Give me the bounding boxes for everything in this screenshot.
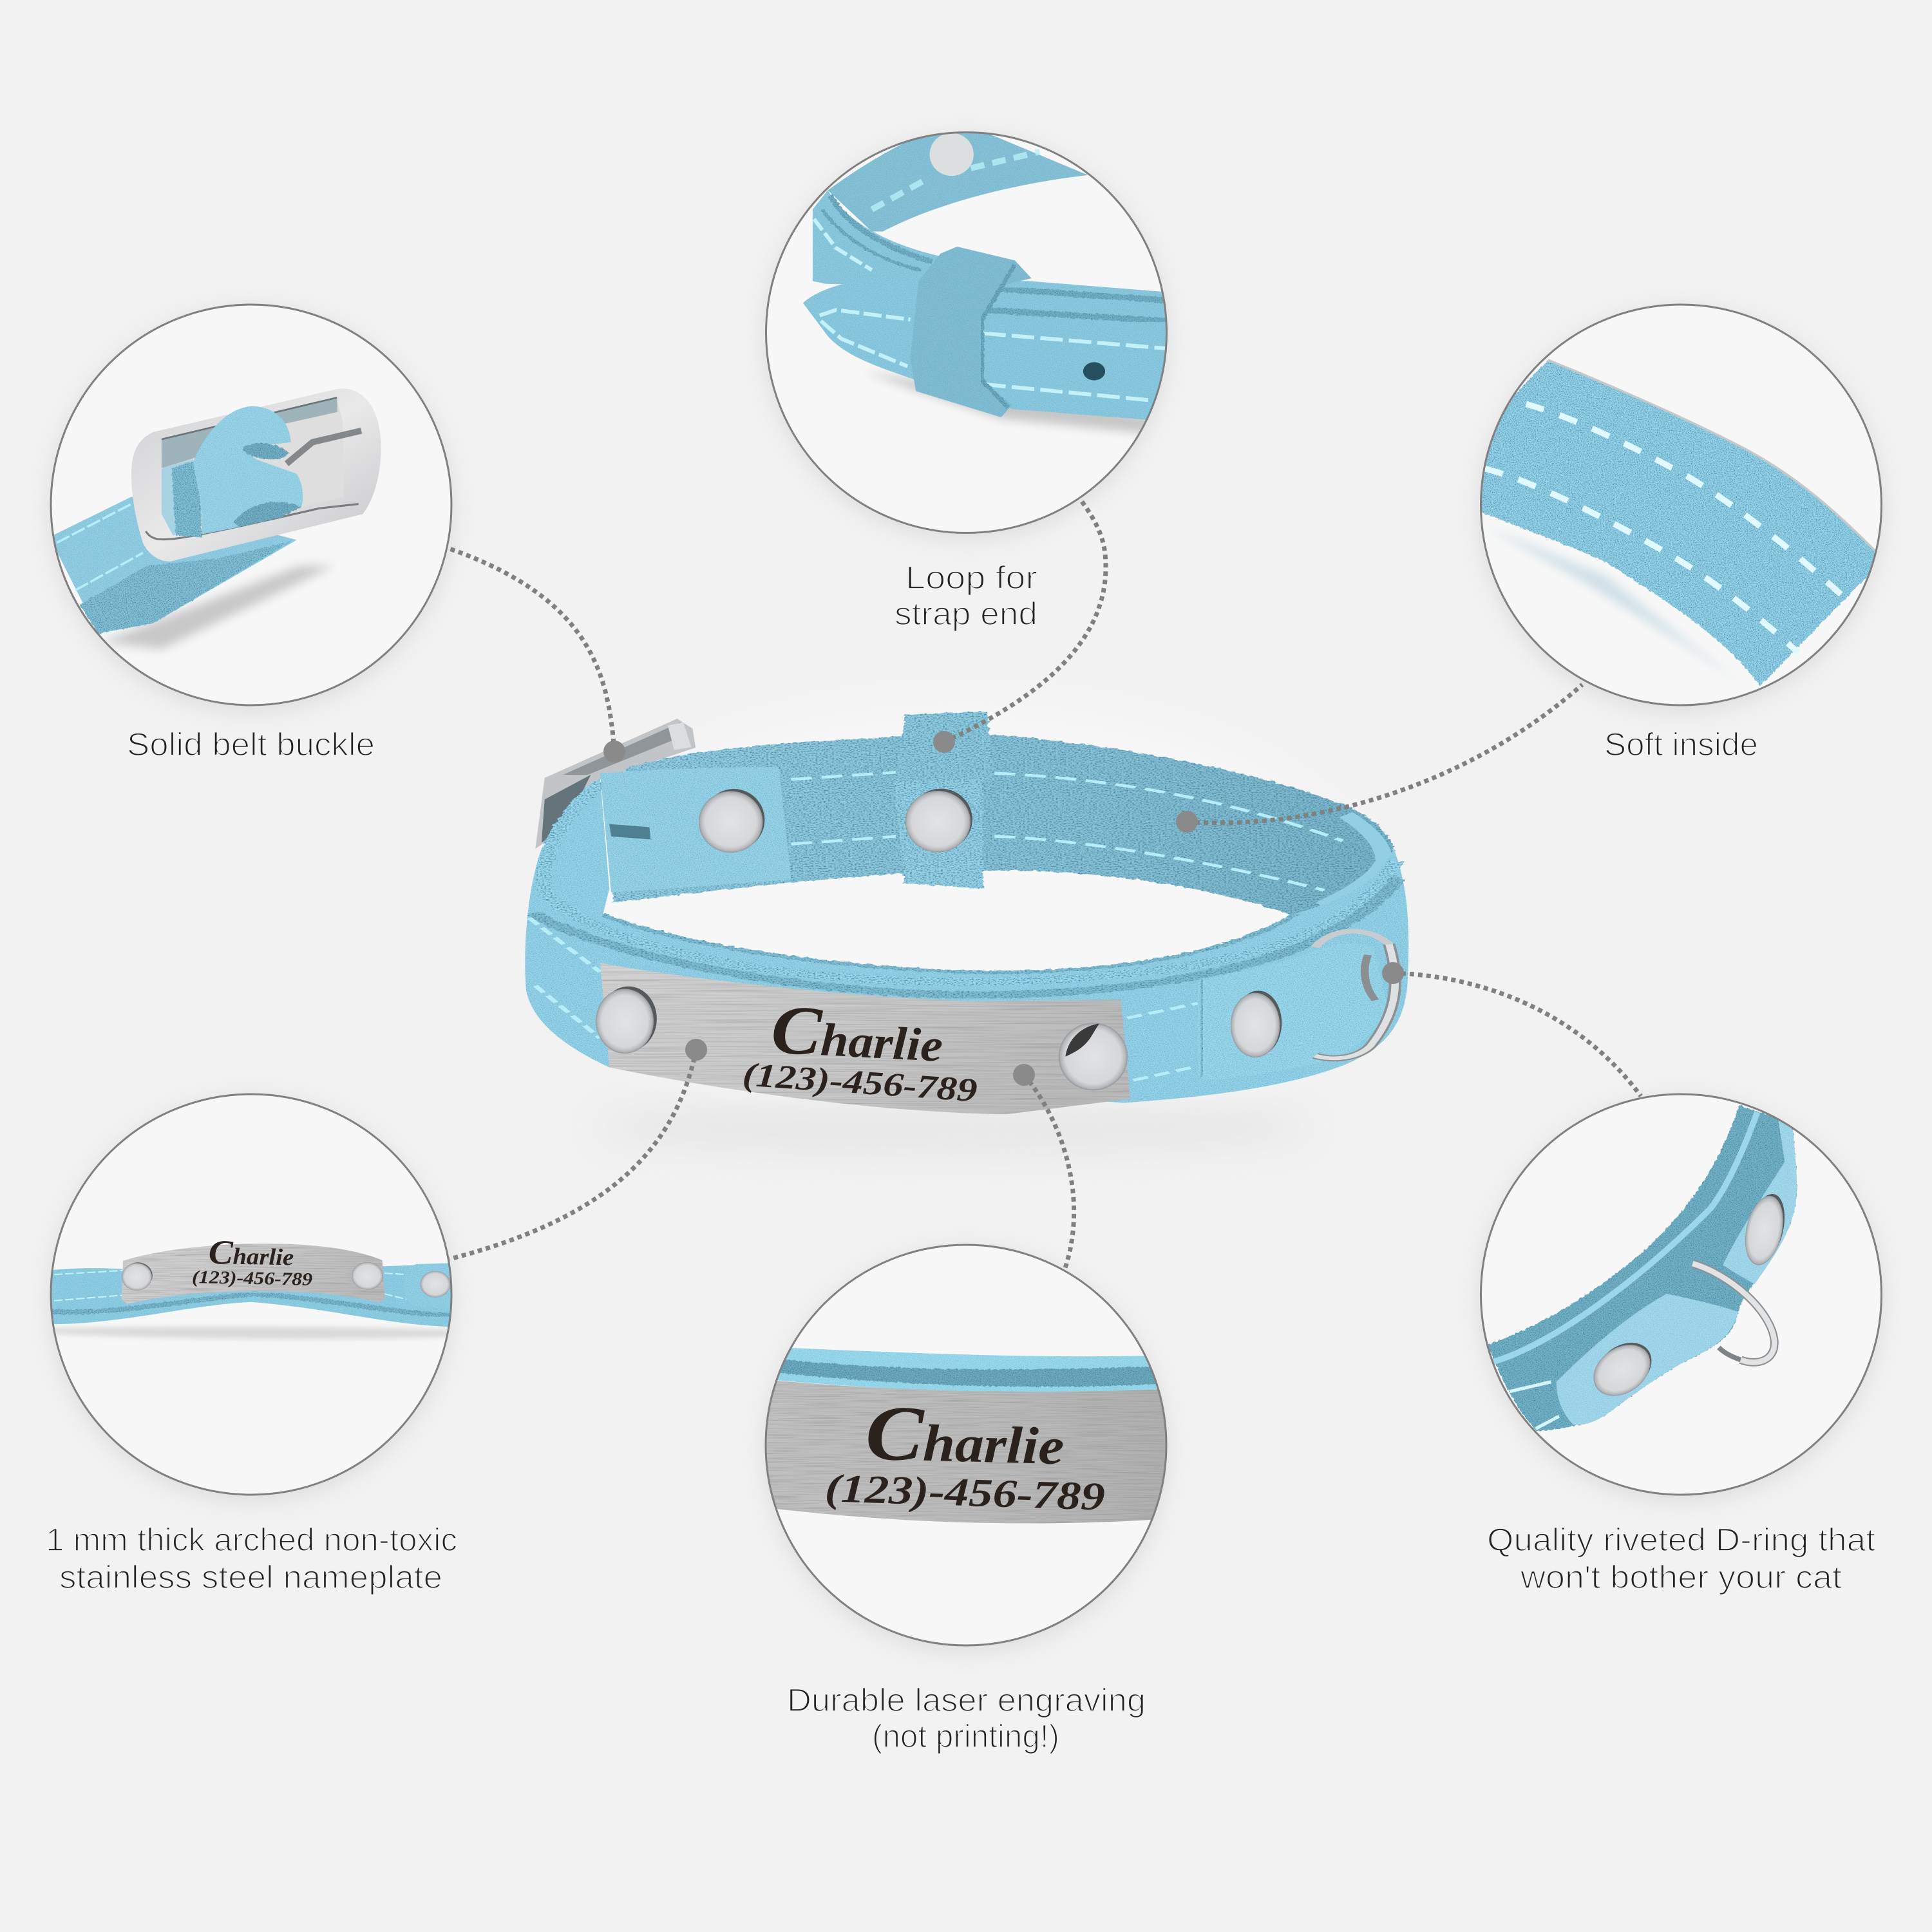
stitching	[1526, 404, 1853, 606]
tab lower	[1557, 1294, 1738, 1425]
label: loop for strap end: Loop for	[905, 560, 1037, 596]
circle: engraving detail	[764, 1245, 1171, 1651]
main strap right	[968, 281, 1166, 421]
d-ring front	[1315, 944, 1395, 1058]
buckle side tab	[600, 767, 791, 893]
label: d-ring: won't bother your cat	[1520, 1559, 1842, 1595]
engraved phone: (123)-456-789	[824, 1466, 1106, 1519]
blue strap strip	[770, 1347, 1166, 1395]
buckle pin	[287, 431, 361, 464]
engraved phone: (123)-456-789	[192, 1267, 312, 1290]
buckle behind strap	[535, 719, 696, 849]
circle: soft inside detail	[1479, 305, 1882, 711]
strap	[50, 497, 297, 633]
ring rear section	[1719, 1347, 1741, 1360]
main collar photo	[525, 702, 1408, 1153]
strap tip	[803, 276, 918, 380]
connector: nameplate	[450, 1039, 707, 1259]
engraved name: Charlie	[208, 1233, 294, 1273]
engraved name: Charlie	[864, 1389, 1065, 1481]
connector: loop	[933, 500, 1106, 753]
steel plate	[122, 1244, 385, 1304]
circle: loop detail	[765, 129, 1167, 538]
label: engraving: Durable laser engraving	[787, 1682, 1146, 1718]
strap	[49, 1264, 453, 1327]
circle: nameplate detail	[49, 1094, 453, 1501]
side tab	[404, 1263, 453, 1309]
left strap section	[813, 190, 941, 287]
far strap	[828, 129, 1088, 231]
label: engraving	[787, 1682, 1146, 1754]
suede strap	[1479, 360, 1879, 686]
engraved phone number: (123)-456-789	[741, 1056, 978, 1109]
steel plate	[764, 1379, 1171, 1523]
rivets	[123, 1262, 153, 1289]
label: engraving: (not printing!)	[872, 1718, 1059, 1754]
rivets	[1743, 1191, 1790, 1265]
tab upper	[1723, 1118, 1797, 1284]
label: nameplate: stainless steel nameplate	[59, 1559, 442, 1595]
nameplate	[596, 963, 1130, 1114]
d-ring top arc	[1315, 931, 1389, 947]
label: soft inside: Soft inside	[1604, 726, 1758, 762]
label: loop for strap end	[895, 560, 1037, 632]
ring front section	[1692, 1264, 1774, 1362]
connector: engraving	[1013, 1064, 1074, 1268]
connector: soft inside	[1176, 685, 1582, 833]
keeper loop	[911, 247, 1032, 417]
label: solid belt buckle: Solid belt buckle	[127, 726, 375, 762]
circle: d-ring detail	[1480, 1094, 1882, 1501]
label: nameplate: 1 mm thick arched non-toxic	[46, 1522, 457, 1558]
label: loop for strap end: strap end	[895, 596, 1037, 632]
label: d-ring	[1487, 1522, 1875, 1595]
connector: buckle	[450, 549, 625, 762]
circle: buckle detail	[50, 305, 452, 711]
engraved name: Charlie	[770, 991, 945, 1077]
strap loop	[893, 712, 994, 889]
punched hole	[1083, 362, 1105, 381]
front collar band	[525, 778, 1408, 1103]
d-ring riveted tab	[1198, 943, 1389, 1081]
collar edge	[1488, 1105, 1797, 1432]
connector: d-ring	[1382, 962, 1641, 1096]
label: d-ring: Quality riveted D-ring that	[1487, 1522, 1875, 1558]
inner soft suede strap	[612, 735, 1396, 916]
label: nameplate	[46, 1522, 457, 1595]
leather keeper	[172, 459, 202, 537]
buckle frame	[131, 388, 381, 562]
